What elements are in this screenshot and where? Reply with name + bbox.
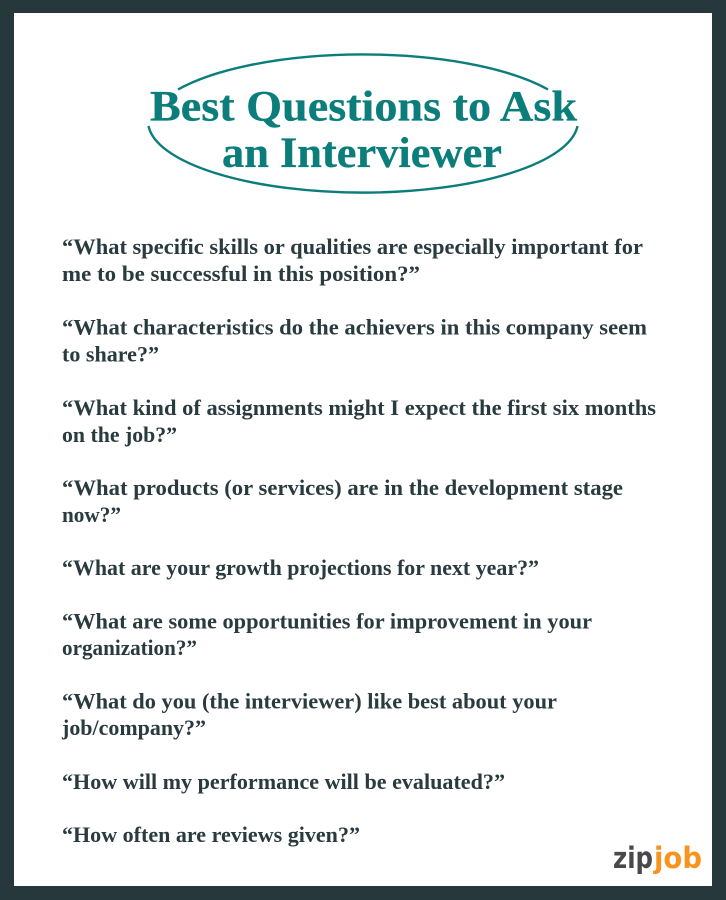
title line 2: an Interviewer <box>222 129 502 177</box>
question 6 <box>62 608 592 660</box>
title line 1: Best Questions to Ask <box>150 82 578 130</box>
question 3 <box>62 395 656 447</box>
question 3: “What kind of assignments might I expect the first six months <box>62 395 656 420</box>
oval lower arc <box>148 126 578 193</box>
question 7 <box>61 688 557 740</box>
question 5: “What are your growth projections for next year?” <box>62 555 539 580</box>
question 7: job/company?” <box>61 715 206 740</box>
question 4: “What products (or services) are in the development stage <box>62 475 623 500</box>
question 8: “How will my performance will be evaluated?” <box>62 769 505 794</box>
question 1 <box>62 234 643 286</box>
oval upper arc <box>178 54 548 90</box>
question 6: organization?” <box>62 635 197 660</box>
question 9: “How often are reviews given?” <box>62 822 360 847</box>
zipjob logo: job <box>653 841 702 875</box>
question 6: “What are some opportunities for improvement in your <box>62 608 592 634</box>
question 3: on the job?” <box>62 422 177 447</box>
zipjob logo: zip <box>613 841 653 875</box>
question 2 <box>62 314 647 366</box>
question 1: “What specific skills or qualities are especially important for <box>62 234 643 259</box>
zipjob logo <box>613 841 702 875</box>
question 2: to share?” <box>62 342 159 366</box>
question 4: now?” <box>62 502 121 527</box>
title with oval <box>148 54 578 193</box>
question 1: me to be successful in this position?” <box>62 261 420 286</box>
question 7: “What do you (the interviewer) like best about your <box>62 688 557 714</box>
question 4 <box>62 475 623 527</box>
question list <box>61 234 656 847</box>
question 2: “What characteristics do the achievers in this company seem <box>62 314 647 340</box>
